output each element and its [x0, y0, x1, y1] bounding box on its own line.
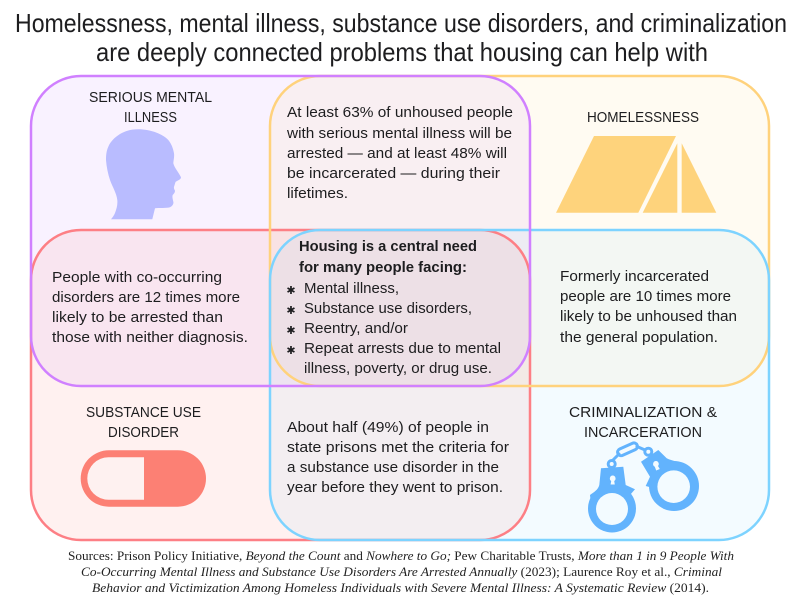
text: centre housing message: Repeat arrests due to mental	[304, 341, 501, 357]
text: right statistic	[560, 269, 737, 346]
text: bottom centre statistic: year before they went to prison.	[287, 480, 503, 496]
text: left statistic	[52, 270, 248, 346]
sources: Behavior and Victimization Among Homeless Individuals with Severe Mental Illness: A Systematic Review (2014).	[92, 581, 709, 595]
heading: substance use disorder: SUBSTANCE USE	[86, 405, 201, 421]
panel: substance use disorder fill	[31, 230, 530, 540]
text: top centre statistic: arrested — and at least 48% will	[287, 146, 507, 162]
text: right statistic: the general population.	[560, 330, 718, 346]
title	[15, 8, 787, 67]
text: bottom centre statistic: a substance use disorder in the	[287, 460, 499, 476]
sources: Sources: Prison Policy Initiative, Beyond the Count and Nowhere to Go; Pew Charitable Trusts, More than 1 in 9 People With	[68, 549, 734, 563]
sources: Co-Occurring Mental Illness and Substance Use Disorders Are Arrested Annually (2023); Laurence Roy et al., Criminal	[81, 565, 723, 579]
text: bottom centre statistic	[287, 420, 509, 496]
heading: homelessness: HOMELESSNESS	[587, 110, 699, 126]
text: centre housing message: for many people facing:	[299, 260, 467, 276]
icon: handcuffs	[588, 442, 699, 532]
heading: substance use disorder: DISORDER	[108, 425, 179, 441]
text: centre housing message: Reentry, and/or	[304, 321, 408, 337]
outline: serious mental illness	[31, 76, 530, 386]
text: centre housing message: illness, poverty, or drug use.	[304, 361, 492, 377]
outline: criminalization	[270, 230, 769, 540]
outline: substance use disorder	[31, 230, 530, 540]
text: centre housing message: Substance use disorders,	[304, 301, 472, 317]
text: left statistic: disorders are 12 times more	[52, 290, 240, 306]
text: top centre statistic: lifetimes.	[287, 186, 348, 202]
text: top centre statistic: be incarcerated — during their	[287, 166, 500, 182]
text: bottom centre statistic: state prisons met the criteria for	[287, 440, 509, 456]
heading: serious mental illness: SERIOUS MENTAL	[89, 90, 212, 106]
text: right statistic: likely to be unhoused than	[560, 309, 737, 325]
icon: pill	[81, 450, 206, 507]
heading: substance use disorder	[86, 405, 201, 441]
text: top centre statistic: At least 63% of unhoused people	[287, 105, 513, 121]
text: centre housing message: ✱	[286, 324, 296, 337]
panel: criminalization fill	[270, 230, 769, 540]
text: bottom centre statistic: About half (49%) of people in	[287, 420, 489, 436]
text: centre housing message: Housing is a central need	[299, 239, 477, 255]
text: left statistic: People with co-occurring	[52, 270, 222, 286]
text: centre housing message: ✱	[286, 344, 296, 357]
heading: criminalization and incarceration: CRIMINALIZATION &	[569, 405, 717, 421]
heading: serious mental illness	[89, 90, 212, 126]
text: centre housing message	[286, 239, 501, 377]
outline: homelessness	[270, 76, 769, 386]
icon: head	[106, 129, 181, 219]
heading: criminalization and incarceration	[569, 405, 717, 441]
text: centre housing message: ✱	[286, 304, 296, 317]
text: left statistic: likely to be arrested than	[52, 310, 223, 326]
text: left statistic: those with neither diagnosis.	[52, 330, 248, 346]
sources	[68, 549, 734, 595]
title: are deeply connected problems that housing can help with	[96, 37, 708, 67]
panel: serious mental illness fill	[31, 76, 530, 386]
heading: criminalization and incarceration: INCARCERATION	[584, 425, 702, 441]
venn diagram	[31, 76, 769, 540]
text: right statistic: people are 10 times more	[560, 289, 731, 305]
heading: serious mental illness: ILLNESS	[124, 110, 177, 126]
icon: tent	[556, 136, 716, 213]
text: top centre statistic	[286, 105, 513, 202]
text: top centre statistic: with serious mental illness will be	[286, 126, 512, 142]
text: centre housing message: ✱	[286, 284, 296, 297]
text: right statistic: Formerly incarcerated	[560, 269, 709, 285]
panel: homelessness fill	[270, 76, 769, 386]
text: centre housing message: Mental illness,	[304, 281, 399, 297]
